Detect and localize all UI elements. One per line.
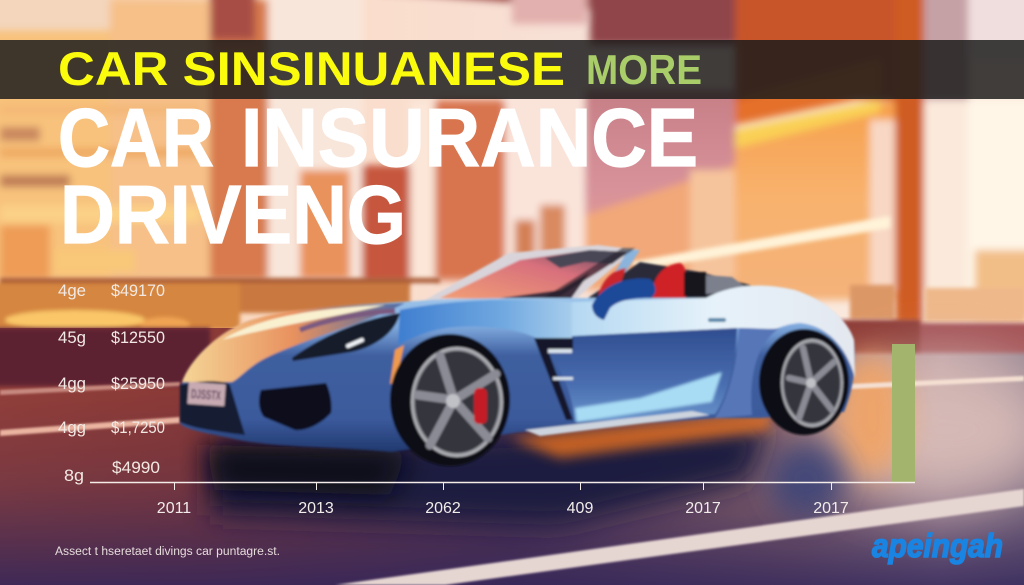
license plate: DJSSTX (191, 386, 222, 403)
road light strips (0, 382, 180, 395)
fender highlight (398, 300, 572, 345)
rear quarter blue (715, 328, 780, 418)
front grille (180, 381, 245, 435)
chart: x-axis year labels (157, 500, 849, 517)
door light reflection (575, 372, 722, 422)
windshield frame and glass (425, 245, 640, 302)
chart: green bar (892, 344, 915, 482)
label row 3 (58, 375, 165, 393)
door lower panel (536, 328, 737, 422)
label row 5: 8g (64, 467, 84, 485)
label row 5 (64, 459, 160, 485)
label row 1 (58, 282, 165, 300)
right pillar (895, 0, 924, 325)
chart: x-axis year labels: 409 (567, 500, 593, 517)
footnote: Assect t hseretaet divings car puntagre.st. (55, 546, 280, 558)
label row 3: 4gg (58, 375, 86, 393)
door handle (708, 318, 726, 322)
label row 2: $12550 (111, 329, 165, 347)
heading line 1 (58, 91, 698, 184)
label row 4: $1,7250 (111, 419, 165, 437)
label row 1: 4ge (58, 282, 86, 300)
chart: x-axis year labels: 2062 (425, 500, 461, 517)
chart: x-axis year labels: 2011 (157, 500, 191, 517)
railing band (0, 278, 1024, 333)
illustration: blue convertible sports car (180, 245, 855, 466)
label row 4: 4gg (58, 419, 86, 437)
main heading (58, 91, 698, 261)
rear quarter highlight (572, 286, 855, 378)
orange wall (735, 0, 895, 100)
banner title green: MORE (586, 46, 702, 93)
lower road (0, 328, 1024, 585)
front wheel (390, 334, 510, 466)
logo: apeingah (872, 527, 1003, 564)
left building (0, 30, 115, 280)
chart: y-axis labels (58, 282, 165, 485)
chart: x-axis year labels: 2013 (298, 500, 334, 517)
top banner (0, 40, 1024, 99)
front orange marker (390, 345, 404, 384)
chart: x-axis year labels: 2017 (813, 500, 849, 517)
chart: x axis with ticks (90, 482, 915, 490)
car body (180, 286, 855, 452)
side sill (525, 411, 710, 436)
white diagonal road stripe (335, 489, 1024, 585)
label row 4 (58, 419, 165, 437)
label row 2: 45g (58, 329, 86, 347)
label row 1: $49170 (111, 282, 165, 300)
label row 3: $25950 (111, 375, 165, 393)
license plate (187, 382, 226, 406)
tall pillar behind heading (210, 0, 270, 280)
banner title yellow: CAR SINSINUANESE (58, 42, 565, 95)
heading line 2: DRIVENG (60, 168, 406, 261)
label row 2 (58, 329, 165, 347)
side vent (534, 338, 573, 420)
top dark beam (360, 0, 1024, 18)
side mirror (592, 278, 656, 320)
label row 5: $4990 (112, 459, 160, 477)
heading line 1: CAR (58, 91, 214, 184)
headlight (292, 313, 400, 361)
car shadow (210, 425, 770, 525)
light streak (630, 216, 890, 270)
chart: x-axis year labels: 2017 (685, 500, 721, 517)
seats and interior (585, 262, 770, 302)
heading line 1: INSURANCE (241, 91, 698, 184)
rear wheel (759, 329, 849, 435)
hood reflection (182, 303, 405, 382)
